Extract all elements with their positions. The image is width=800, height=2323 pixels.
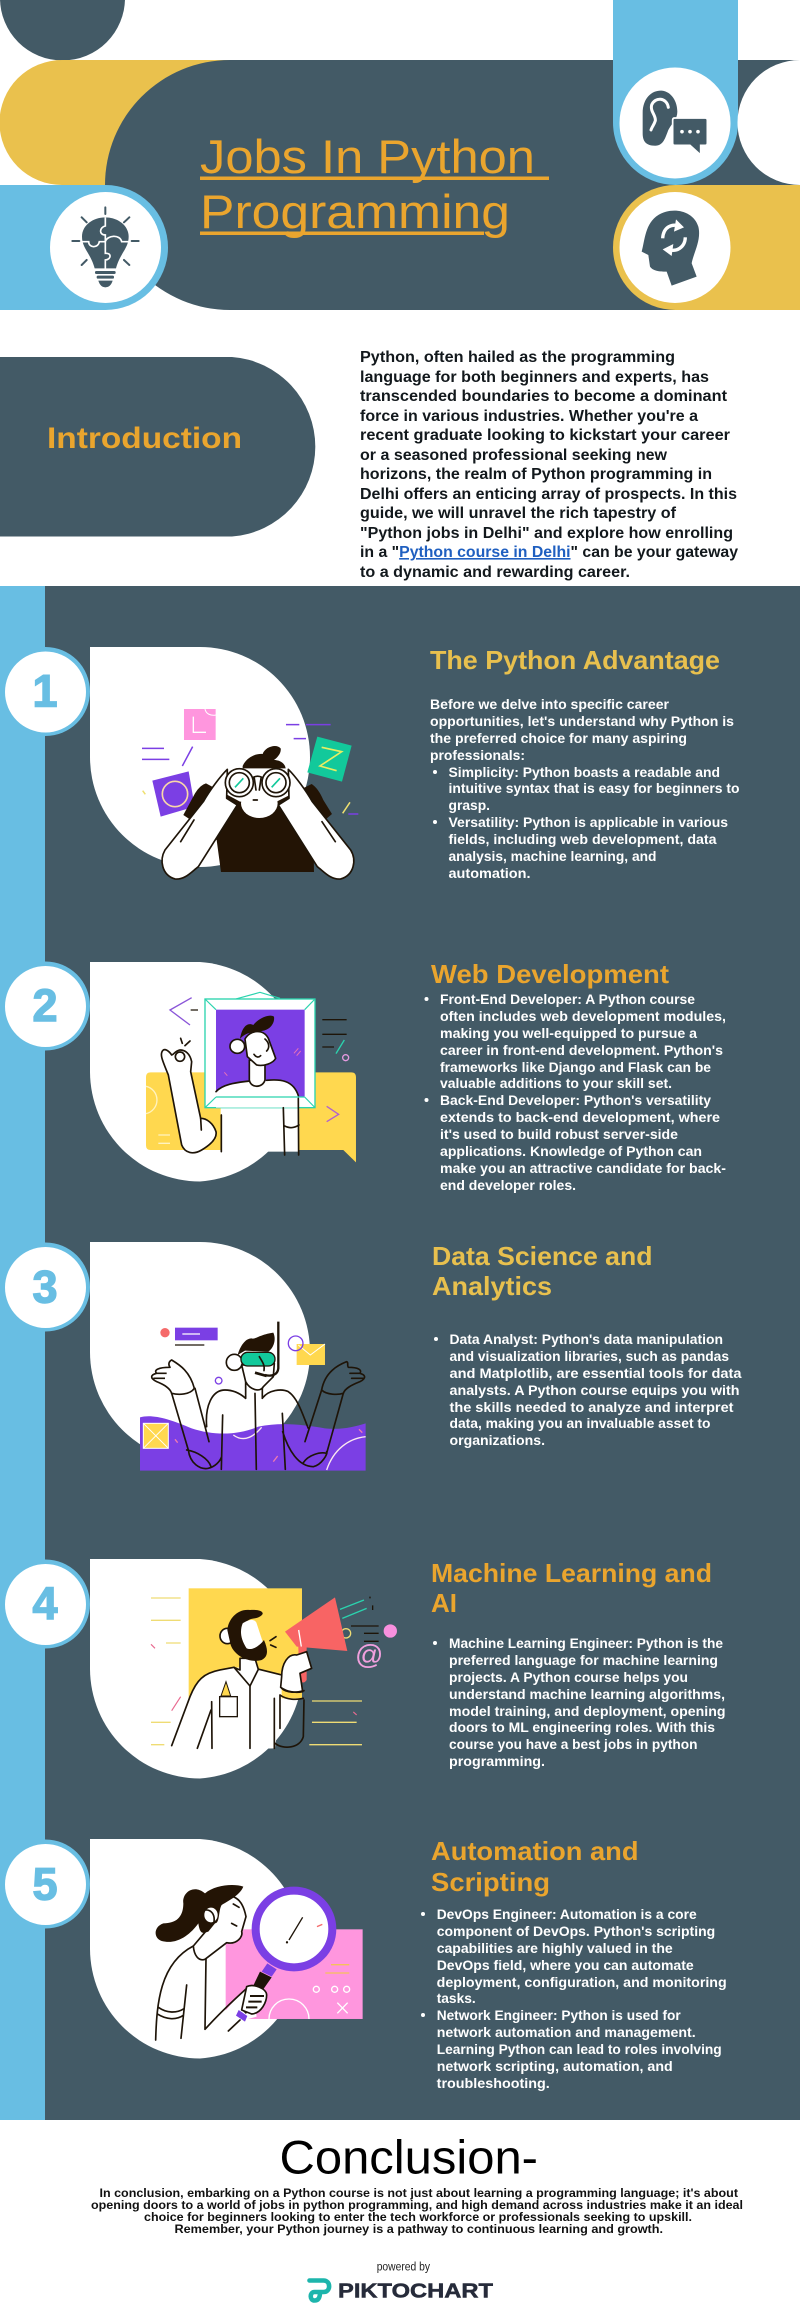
text block: automation and scripting: troubleshooting.: [437, 2076, 550, 2092]
text block: automation and scripting: tasks.: [437, 1991, 476, 2007]
text block: the python advantage: opportunities, let's understand why Python is: [430, 714, 734, 730]
text block: introduction: horizons, the realm of Python programming in: [360, 466, 712, 483]
text block: web development: applications. Knowledge of Python can: [440, 1144, 702, 1160]
heading: machine learning and ai: [431, 1558, 712, 1618]
text block: automation and scripting: network automation and management.: [437, 2025, 696, 2041]
text block: conclusion: In conclusion, embarking on a Python course is not just about learning a programming language; it's about: [100, 2186, 738, 2200]
text block: conclusion: choice for beginners looking to enter the tech workforce or professionals seeking to upskill.: [144, 2210, 692, 2224]
text block: machine learning and ai: preferred language for machine learning: [449, 1653, 718, 1669]
text block: automation and scripting: [421, 1907, 727, 2092]
text block: introduction: in a "Python course in Delhi" can be your gateway: [360, 544, 738, 561]
text block: machine learning and ai: doors to ML engineering roles. With this: [449, 1720, 715, 1736]
text block: introduction: transcended boundaries to become a dominant: [360, 388, 728, 405]
icon: ear and speech bubble: [643, 91, 707, 155]
text block: web development: valuable additions to your skill set.: [440, 1076, 672, 1092]
heading: machine learning and ai: Machine Learning and: [431, 1558, 712, 1588]
text block: the python advantage: Versatility: Python is applicable in various: [448, 815, 728, 831]
text block: the python advantage: [430, 697, 740, 882]
text block: web development: career in front-end development. Python's: [440, 1043, 723, 1059]
heading: conclusion: Conclusion-: [280, 2130, 538, 2184]
text block: conclusion: Remember, your Python journey is a pathway to continuous learning and growth.: [174, 2222, 663, 2236]
text block: data science and analytics: data, making you an invaluable asset to: [450, 1416, 711, 1432]
panel: step two: [1, 962, 303, 1182]
title: [200, 130, 549, 238]
panel: step three: [1, 1242, 310, 1462]
title: Programming: [200, 185, 510, 238]
text block: automation and scripting: Learning Python can lead to roles involving: [437, 2042, 722, 2058]
text block: data science and analytics: organizations.: [450, 1433, 545, 1449]
panel: step one: [1, 647, 310, 867]
illustration: person in picture frame: [146, 992, 356, 1162]
heading: introduction: Introduction: [47, 422, 242, 455]
text block: machine learning and ai: projects. A Python course helps you: [449, 1670, 688, 1686]
text block: automation and scripting: Network Engineer: Python is used for: [437, 2008, 681, 2024]
text block: machine learning and ai: [433, 1636, 726, 1770]
text block: the python advantage: grasp.: [448, 798, 490, 814]
panel: step three: 3: [32, 1262, 58, 1312]
text block: introduction: language for both beginners and experts, has: [360, 369, 709, 386]
text block: web development: extends to back-end development, where: [440, 1110, 720, 1126]
text block: introduction: force in various industries. Whether you're a: [360, 408, 698, 425]
powered by logo: powered by: [377, 2262, 430, 2274]
text block: introduction: recent graduate looking to kickstart your career: [360, 427, 730, 444]
text block: web development: [424, 992, 726, 1194]
text block: data science and analytics: the skills needed to analyze and interpret: [450, 1400, 734, 1416]
text block: web development: Back-End Developer: Python's versatility: [440, 1093, 711, 1109]
panel: introduction: [0, 357, 315, 536]
text block: web development: make you an attractive candidate for back-: [440, 1161, 726, 1177]
text block: the python advantage: Before we delve into specific career: [430, 697, 669, 713]
icon: head with refresh arrows: [642, 211, 699, 286]
illustration: man with megaphone: @: [355, 1639, 383, 1670]
heading: machine learning and ai: AI: [431, 1588, 457, 1618]
header band: [0, 0, 800, 310]
panel: step one: 1: [32, 666, 58, 716]
powered by logo: [310, 2262, 493, 2302]
illustration: snorkel person in waves: [140, 1322, 366, 1471]
text block: automation and scripting: DevOps Engineer: Automation is a core: [437, 1907, 697, 1923]
panel: step four: 4: [32, 1578, 58, 1629]
text block: the python advantage: intuitive syntax that is easy for beginners to: [448, 781, 740, 797]
text block: automation and scripting: capabilities are highly valued in the: [437, 1941, 673, 1957]
text block: the python advantage: analysis, machine learning, and: [448, 849, 656, 865]
text block: data science and analytics: [434, 1332, 742, 1449]
text block: web development: end developer roles.: [440, 1178, 576, 1194]
text block: machine learning and ai: understand machine learning algorithms,: [449, 1687, 725, 1703]
powered by logo: PIKTOCHART: [338, 2280, 493, 2302]
text block: machine learning and ai: programming.: [449, 1754, 545, 1770]
text block: web development: Front-End Developer: A Python course: [440, 992, 695, 1008]
illustration: man with megaphone: [151, 1588, 397, 1750]
text block: machine learning and ai: model training, and deployment, opening: [449, 1704, 726, 1720]
text block: machine learning and ai: Machine Learning Engineer: Python is the: [449, 1636, 723, 1652]
text block: data science and analytics: and Matplotlib, are essential tools for data: [450, 1366, 742, 1382]
heading: automation and scripting: Automation and: [431, 1836, 638, 1866]
text block: automation and scripting: network scripting, automation, and: [437, 2059, 673, 2075]
text block: introduction: "Python jobs in Delhi" and explore how enrolling: [360, 525, 733, 542]
text block: data science and analytics: analysts. A Python course equips you with: [450, 1383, 740, 1399]
text block: introduction: Delhi offers an enticing array of prospects. In this: [360, 486, 737, 503]
text block: data science and analytics: Data Analyst: Python's data manipulation: [450, 1332, 723, 1348]
heading: data science and analytics: [432, 1241, 652, 1301]
text block: the python advantage: automation.: [448, 866, 530, 882]
panel: step four: [1, 1559, 303, 1778]
text block: conclusion: [91, 2186, 743, 2236]
heading: the python advantage: The Python Advantage: [430, 645, 720, 675]
text block: web development: making you well-equipped to pursue a: [440, 1026, 697, 1042]
text block: introduction: or a seasoned professional seeking new: [360, 447, 668, 464]
heading: data science and analytics: Data Science and: [432, 1241, 652, 1271]
text block: introduction: [360, 349, 738, 581]
text block: the python advantage: professionals:: [430, 748, 525, 764]
heading: automation and scripting: Scripting: [431, 1867, 550, 1897]
text block: the python advantage: the preferred choice for many aspiring: [430, 731, 687, 747]
title: Jobs In Python: [200, 130, 549, 183]
text block: introduction: guide, we will unravel the rich tapestry of: [360, 505, 677, 522]
text block: introduction: Python, often hailed as the programming: [360, 349, 675, 366]
heading: web development: Web Development: [431, 959, 669, 989]
heading: data science and analytics: Analytics: [432, 1271, 552, 1301]
panel: step five: [1, 1839, 303, 2058]
panel: step two: 2: [32, 980, 58, 1031]
text block: the python advantage: fields, including web development, data: [448, 832, 717, 848]
text block: conclusion: opening doors to a world of jobs in python programming, and high demand across industries make it an ideal: [91, 2198, 743, 2212]
text block: web development: often includes web development modules,: [440, 1009, 726, 1025]
text block: automation and scripting: component of DevOps. Python's scripting: [437, 1924, 715, 1940]
text block: web development: it's used to build robust server-side: [440, 1127, 678, 1143]
heading: automation and scripting: [431, 1836, 638, 1897]
text block: automation and scripting: deployment, configuration, and monitoring: [437, 1975, 727, 1991]
text block: the python advantage: Simplicity: Python boasts a readable and: [448, 765, 720, 781]
panel: step five: 5: [32, 1858, 58, 1910]
illustration: woman with magnifying glass: [155, 1885, 363, 2040]
text block: web development: frameworks like Django and Flask can be: [440, 1060, 711, 1076]
text block: automation and scripting: DevOps field, where you can automate: [437, 1958, 694, 1974]
text block: introduction: to a dynamic and rewarding career.: [360, 564, 630, 581]
panel: main background: [0, 586, 800, 2120]
icon: puzzle light bulb: [72, 207, 139, 287]
text block: machine learning and ai: course you have a best jobs in python: [449, 1737, 698, 1753]
text block: data science and analytics: and visualization libraries, such as pandas: [450, 1349, 729, 1365]
illustration: person with binoculars: [142, 709, 358, 879]
